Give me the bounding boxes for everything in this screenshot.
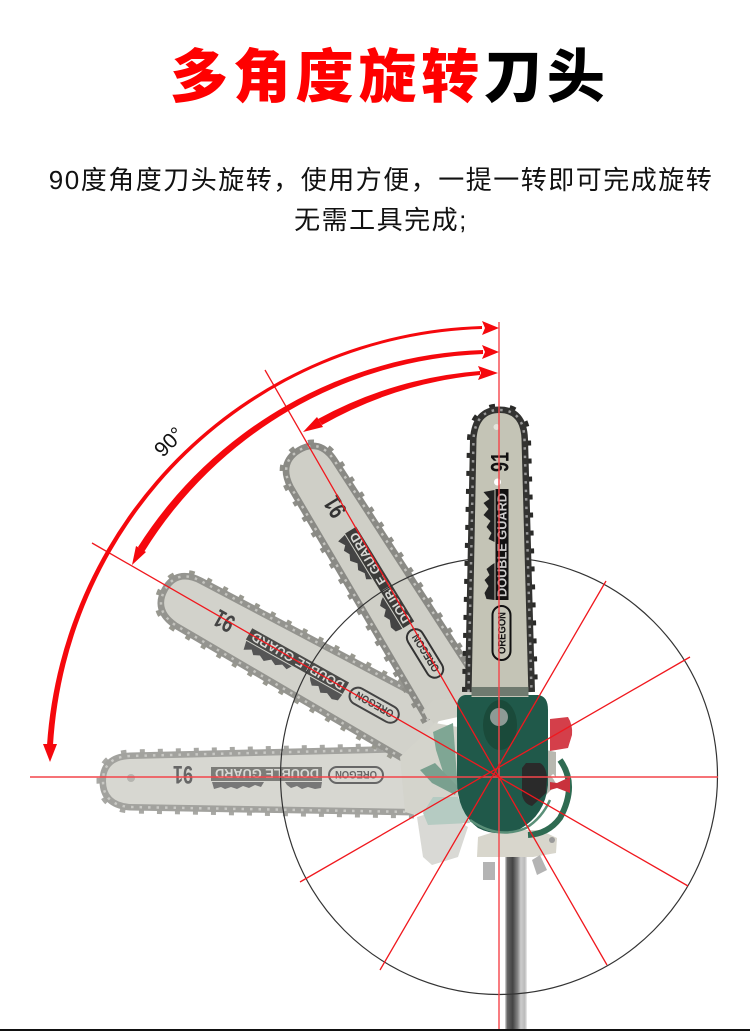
blade: 60 degree position: OREGON [354,688,396,719]
band highlight [528,775,559,828]
bolt [490,708,508,726]
red guide lines [30,322,718,1029]
blade: 60 degree position [150,562,445,765]
vertical blade: OREGON [496,612,508,654]
circle [280,558,718,994]
right side bracket [546,750,556,795]
blade: 30 degree position: 91 [318,491,353,522]
right side curved band [528,760,569,835]
housing window [522,763,547,806]
blade: horizontal position [103,749,419,812]
vertical blade [468,410,532,697]
clamp and feet [477,830,557,880]
description line 2: 无需工具完成; [294,205,468,235]
blade: 30 degree position: OREGON [410,632,442,674]
pole [505,857,527,1029]
bolt recess [483,700,517,750]
blade: 30 degree position [272,434,484,725]
blade: horizontal position: 91 [173,760,193,788]
faded rotated housing ghost [400,699,470,865]
blade: 60 degree position: 91 [209,603,240,638]
vertical blade: DOUBLE GUARD [494,493,510,597]
arc arrow 60 degrees [132,345,499,565]
blade: 30 degree position: DOUBLE GUARD [346,530,413,626]
bottom border line [0,1029,750,1031]
red knob upper [550,717,572,751]
housing lower ring [470,800,550,832]
description line 1: 90度角度刀头旋转，使用方便，一提一转即可完成旋转 [49,165,713,195]
green housing [457,695,548,833]
title: 多角度旋转刀头 [170,45,610,110]
blade: horizontal position: DOUBLE GUARD [215,766,319,781]
angle label: 90° [150,423,189,462]
red knob lower [550,777,570,793]
blade: horizontal position: OREGON [335,768,377,780]
blade: 60 degree position: DOUBLE GUARD [249,629,347,693]
vertical blade: 91 [486,452,514,472]
arc arrow 90 degrees [43,321,499,762]
arc arrow 30 degrees [303,366,498,432]
